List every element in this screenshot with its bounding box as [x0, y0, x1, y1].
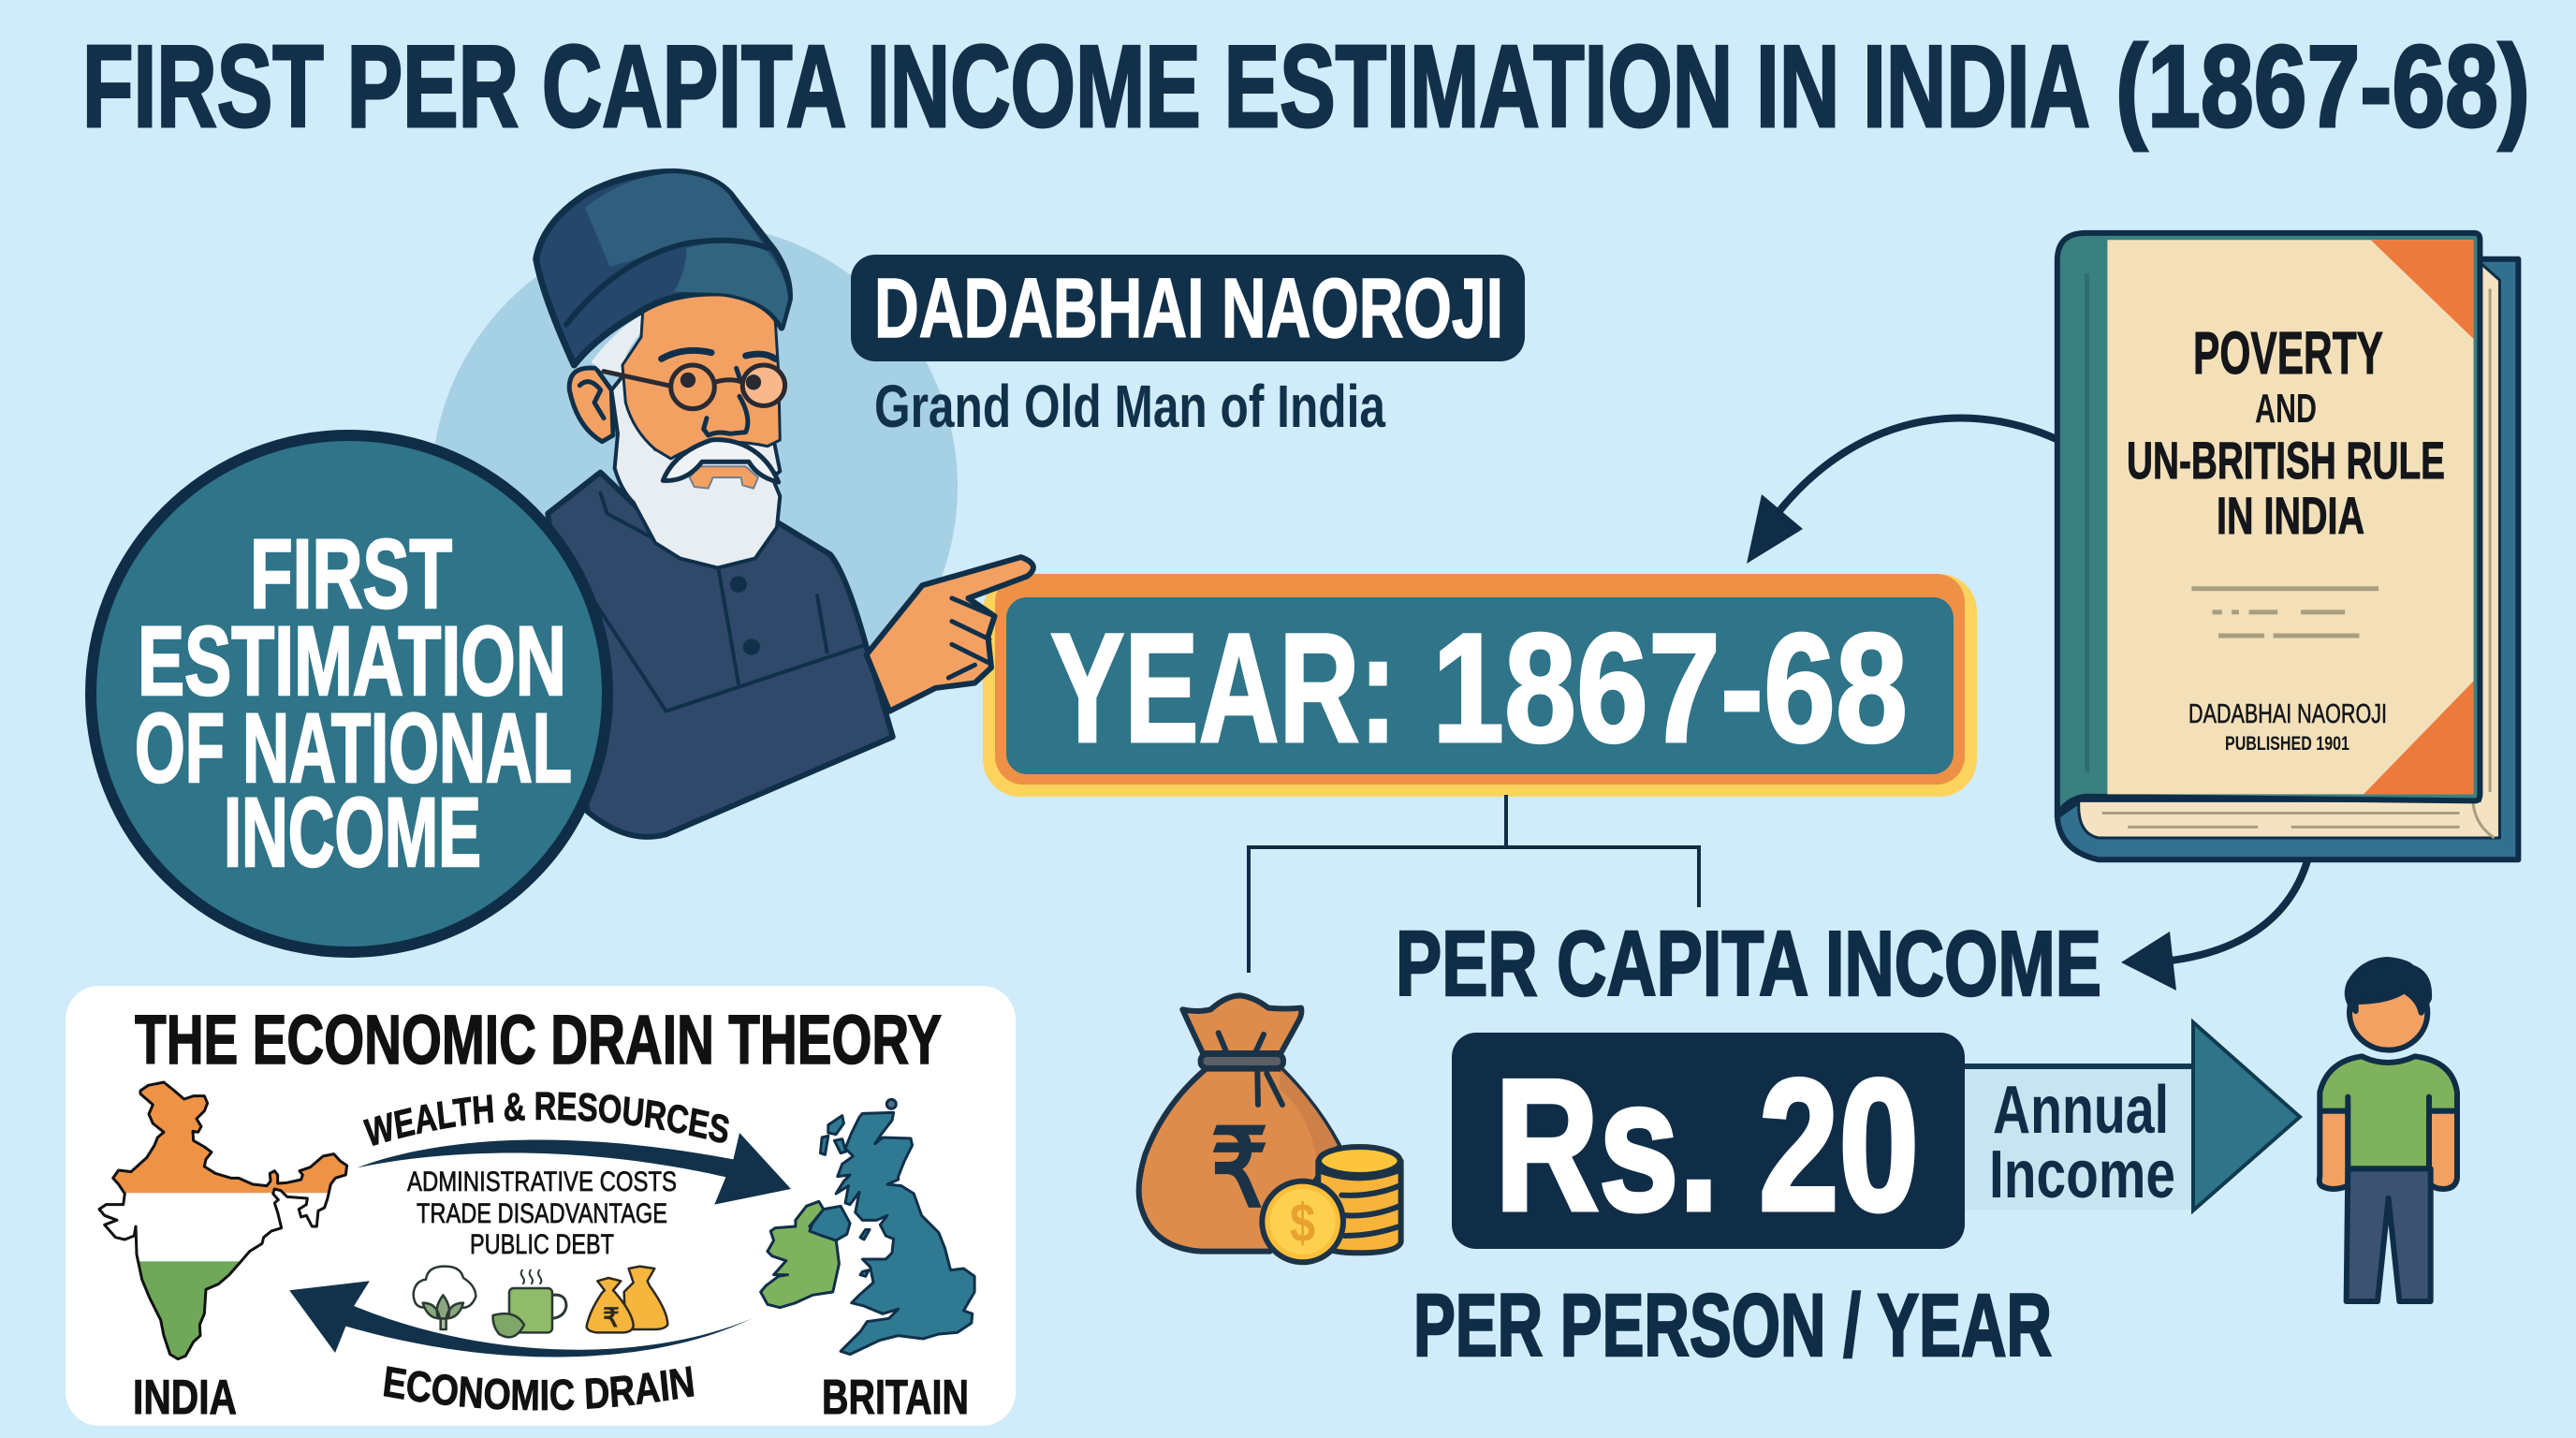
pages — [2079, 263, 2499, 838]
drain causes list: TRADE DISADVANTAGE — [417, 1198, 667, 1229]
nose — [704, 368, 748, 435]
name plate — [851, 255, 1525, 361]
per capita heading: PER CAPITA INCOME — [1396, 912, 2101, 1015]
arrow: book to per capita — [2121, 858, 2308, 990]
map: Britain and Ireland — [761, 1099, 974, 1355]
drain causes list — [407, 1167, 677, 1260]
drain causes list: ADMINISTRATIVE COSTS — [407, 1167, 677, 1197]
book cover text: UN-BRITISH RULE — [2127, 431, 2445, 490]
small rupee glyph: ₹ — [603, 1303, 620, 1332]
coin stack — [1318, 1161, 1401, 1253]
curved label: wealth and resources: WEALTH & RESOURCES — [363, 1092, 729, 1146]
book cover text — [2127, 319, 2445, 755]
subtitle: Grand Old Man of India — [874, 373, 1385, 440]
connector lines — [1249, 795, 1699, 973]
book cover text: PUBLISHED 1901 — [2225, 733, 2349, 755]
book cover text: DADABHAI NAOROJI — [2188, 699, 2387, 729]
drain causes list: PUBLIC DEBT — [470, 1229, 614, 1260]
white hair — [592, 315, 641, 377]
hat — [536, 171, 789, 365]
ear — [569, 368, 613, 442]
curved label: economic drain: ECONOMIC DRAIN — [384, 1366, 695, 1410]
annual income arrow — [1965, 1022, 2300, 1212]
bag tie — [1201, 1054, 1283, 1068]
circle badge: first estimation: ESTIMATION — [138, 607, 566, 716]
person arms — [2320, 1111, 2457, 1189]
person shirt — [2320, 1056, 2457, 1168]
year box: 1867-68 — [1432, 602, 1908, 775]
icon: pointing hand — [867, 557, 1033, 712]
person trousers — [2347, 1168, 2431, 1301]
book — [2057, 233, 2518, 859]
backdrop circle behind portrait — [432, 224, 958, 750]
illustration: Dadabhai Naoroji coat — [548, 473, 893, 837]
map: India tricolour — [94, 1077, 353, 1364]
coat details — [593, 493, 867, 712]
front cover — [2057, 233, 2480, 816]
per person caption: PER PERSON / YEAR — [1413, 1276, 2052, 1375]
label: India: INDIA — [133, 1371, 237, 1425]
bag top — [1182, 995, 1301, 1053]
hat panels — [585, 173, 765, 267]
cover corners — [2371, 240, 2474, 339]
person head — [2349, 976, 2427, 1050]
book cover text: AND — [2255, 386, 2317, 432]
moustache — [663, 440, 779, 482]
panel: economic drain theory — [66, 986, 1016, 1426]
panel heading: THE ECONOMIC DRAIN THEORY — [135, 1001, 942, 1078]
arrow: drain to India — [289, 1281, 752, 1357]
spine groove — [2085, 273, 2089, 772]
year box: YEAR: — [1050, 602, 1397, 775]
name plate: DADABHAI NAOROJI — [874, 262, 1503, 356]
arrow: wealth to Britain — [358, 1133, 791, 1205]
illustration: Dadabhai Naoroji head — [536, 171, 789, 568]
label: Britain: BRITAIN — [822, 1371, 969, 1425]
circle badge: first estimation: FIRST — [250, 520, 452, 629]
curved label: economic drain — [384, 1366, 695, 1410]
icon: money bag with coins — [1139, 995, 1401, 1262]
icon: cotton — [414, 1267, 476, 1329]
coin — [1262, 1181, 1343, 1262]
circle badge: first estimation — [91, 435, 607, 952]
placeholder rules — [2191, 589, 2378, 636]
face — [622, 295, 780, 459]
circle badge: first estimation: INCOME — [224, 778, 481, 888]
icon: tea mug — [493, 1269, 566, 1337]
brows — [662, 350, 711, 359]
mouth — [690, 466, 758, 489]
arrow: book to year — [1747, 418, 2058, 564]
book cover text: IN INDIA — [2217, 486, 2364, 545]
glasses — [604, 365, 785, 409]
dollar glyph: $ — [1290, 1193, 1315, 1254]
coat buttons — [730, 576, 760, 655]
annual income arrow: Income — [1989, 1137, 2175, 1212]
icon: money bags — [587, 1267, 667, 1332]
beard — [611, 374, 780, 568]
rupee glyph: ₹ — [1210, 1108, 1268, 1229]
bag strings — [1219, 1033, 1282, 1105]
annual income arrow: Annual — [1993, 1073, 2169, 1148]
person hair — [2348, 960, 2429, 1013]
book cover text: POVERTY — [2193, 319, 2383, 387]
icon: person — [2320, 960, 2457, 1301]
amount box: Rs. 20 — [1495, 1041, 1919, 1250]
bag body — [1139, 1069, 1339, 1252]
circle badge: first estimation: OF NATIONAL — [135, 694, 572, 803]
coat — [548, 473, 893, 837]
back cover — [2057, 259, 2518, 859]
year box — [983, 574, 1977, 797]
